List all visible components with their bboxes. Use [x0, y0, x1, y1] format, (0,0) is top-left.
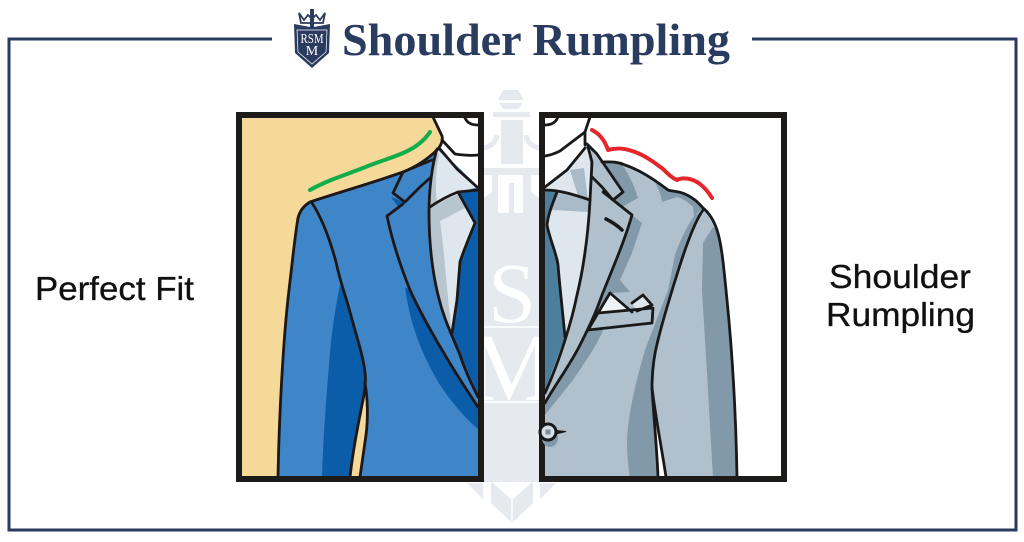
logo: crest: RSM	[300, 32, 324, 47]
tie	[452, 189, 480, 400]
watermark: brand shield: M	[469, 314, 555, 421]
watermark: brand shield: S	[488, 245, 536, 341]
shirt	[429, 149, 478, 207]
green fit line	[310, 132, 430, 190]
label: shoulder rumpling: Shoulder	[829, 258, 971, 295]
logo: crest: M	[306, 44, 319, 59]
label: shoulder rumpling: Rumpling	[826, 296, 975, 333]
jacket shadows	[322, 285, 365, 478]
jacket body	[543, 145, 737, 478]
label: shoulder rumpling	[826, 258, 975, 333]
pocket	[588, 308, 653, 330]
panel: perfect fit jacket	[239, 115, 481, 479]
tie	[543, 191, 565, 396]
outlines	[545, 117, 737, 477]
title: Shoulder Rumpling	[342, 14, 730, 65]
collar fill	[587, 144, 623, 200]
logo: crest	[294, 9, 330, 68]
shirt	[543, 148, 590, 200]
button	[540, 424, 566, 447]
jacket shadows	[604, 162, 638, 207]
label: perfect fit: Perfect Fit	[35, 270, 194, 307]
red rumple line	[592, 130, 712, 198]
outlines	[278, 117, 478, 477]
buttonhole	[606, 219, 622, 230]
jacket body	[278, 148, 480, 478]
lapel fill	[545, 150, 632, 403]
skin gap between sleeve and body	[350, 383, 367, 478]
watermark: brand shield	[467, 90, 556, 523]
panel: shoulder rumpling jacket	[540, 115, 784, 479]
